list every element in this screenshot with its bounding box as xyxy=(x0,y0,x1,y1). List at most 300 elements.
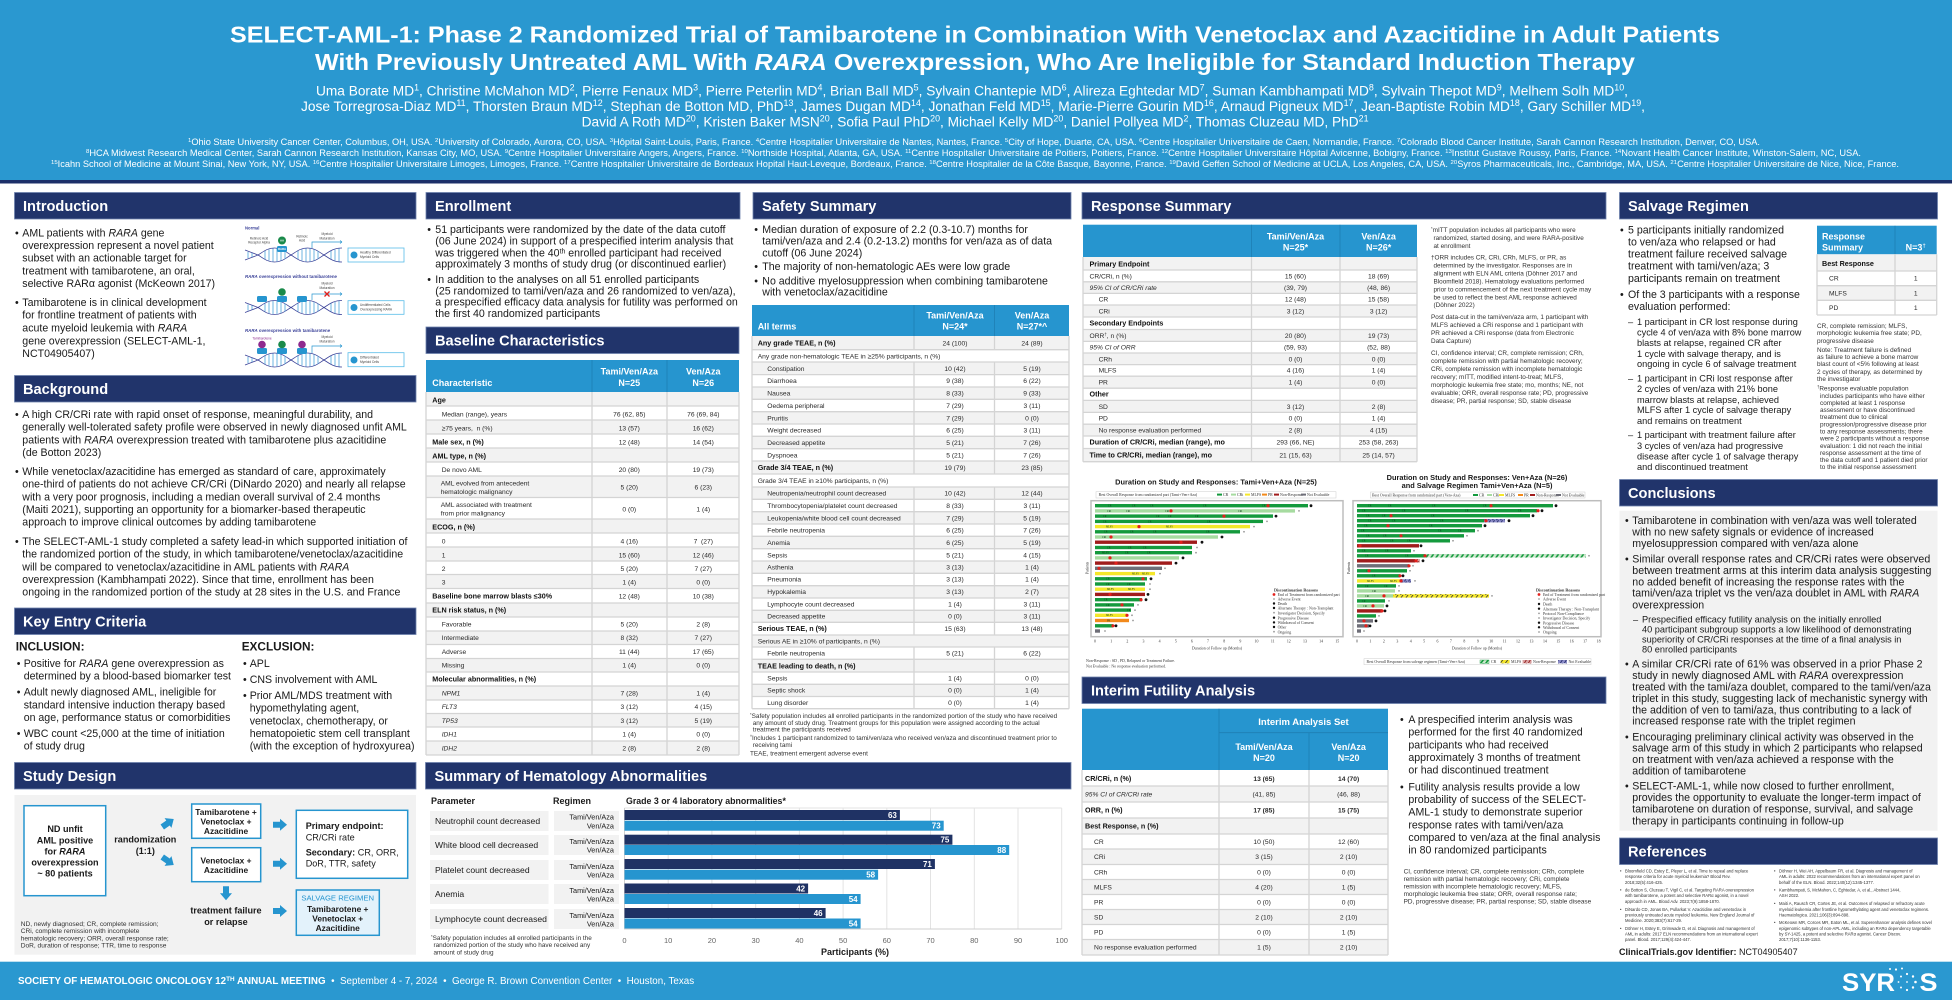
regimen labels: Tami/Ven/Aza xyxy=(569,886,615,895)
table: interim analysis set: 14 (70) xyxy=(1338,776,1359,783)
response labels inside bars, left chart: CR xyxy=(1127,609,1131,612)
text block: background bullets xyxy=(15,409,407,599)
text block: conclusions bullets: no added benefit of increasing the response rates with the xyxy=(1632,576,1904,588)
table: baseline characteristics: 1 xyxy=(442,552,446,559)
table: response summary: SD xyxy=(1099,404,1108,411)
legend: best overall response, left chart xyxy=(1096,492,1336,498)
axis: right chart: 10 xyxy=(1489,640,1493,644)
table: interim analysis set: PR xyxy=(1094,899,1103,906)
axis: right chart: 11 xyxy=(1503,640,1507,644)
response labels inside bars, left chart: CR xyxy=(1103,515,1107,518)
panel: safety summary: Safety Summary xyxy=(762,199,877,215)
legend: best overall response, right chart: Non-Response xyxy=(1536,493,1559,497)
table: treatment-emergent adverse events: 10 (42) xyxy=(944,366,966,373)
table: interim analysis set xyxy=(1082,709,1388,955)
text block: background bullets: approach to improve clinical outcomes by adding tamibarotene xyxy=(22,517,316,529)
exclusion criteria xyxy=(242,639,415,753)
table: interim analysis set: 1 (5) xyxy=(1342,929,1355,936)
exclusion criteria: • xyxy=(243,658,247,670)
table: baseline characteristics: Tami/Ven/Aza xyxy=(601,366,659,376)
table: baseline characteristics: 1 (4) xyxy=(622,580,636,587)
table: salvage response summary: Response xyxy=(1822,231,1865,241)
table: interim analysis set: CR xyxy=(1094,839,1104,846)
bar chart: grade 3 or 4 laboratory abnormalities: 10 xyxy=(664,936,672,945)
bar chart: grade 3 or 4 laboratory abnormalities: 40 xyxy=(795,936,804,945)
response labels inside bars, right chart: CR xyxy=(1405,555,1409,558)
text block: conclusions bullets xyxy=(1625,515,1932,827)
panel: enrollment: Enrollment xyxy=(435,199,511,215)
text block: conclusions bullets: myelosuppression compared with ven/aza alone xyxy=(1632,538,1859,550)
title: SELECT-AML-1: Phase 2 Randomized Trial of Tamibarotene in Combination With Venetoclax and Azacitidine in Adult Patients xyxy=(230,22,1720,48)
response labels inside bars, left chart: CR xyxy=(1206,531,1210,534)
futility abbreviations: PD, progressive disease; PR, partial response; SD, stable disease xyxy=(1404,898,1592,905)
text block: safety bullets: with venetoclax/azacitidine xyxy=(761,287,888,299)
diagram: RARA overexpression mechanism xyxy=(245,226,404,367)
legend: discontinuation reasons, left chart: Withdrawal of Consent xyxy=(1278,621,1315,625)
bar chart: grade 3 or 4 laboratory abnormalities: 54 xyxy=(849,920,858,928)
response footnotes xyxy=(1431,226,1592,405)
hematology footnote: amount of study drug xyxy=(434,950,494,957)
references left column: Döhner H, Estey E, Grimwade D, et al. Diagnosis and management of xyxy=(1625,926,1755,931)
box: triplet arm: Azacitidine xyxy=(204,826,248,836)
table: response summary: N=25* xyxy=(1283,243,1309,253)
text block: conclusions bullets: • xyxy=(1625,515,1629,527)
swimmer chart: Ven+Aza and salvage: Duration on Study and Responses: Ven+Aza (N=26) xyxy=(1387,473,1568,482)
bar chart: grade 3 or 4 laboratory abnormalities: 88 xyxy=(997,846,1007,855)
table: treatment-emergent adverse events: 5 (21) xyxy=(946,651,964,658)
axis: left chart xyxy=(1086,561,1339,650)
exclusion criteria: • xyxy=(243,674,247,686)
table: interim analysis set: 2 (10) xyxy=(1340,944,1357,951)
response labels inside bars, left chart: CR xyxy=(1153,531,1157,534)
text block: salvage bullets: • xyxy=(1620,225,1624,237)
table: response summary: 4 (15) xyxy=(1370,427,1387,434)
axis: left chart: 11 xyxy=(1271,640,1275,644)
response labels inside bars, left chart: CR xyxy=(1106,583,1110,586)
salvage footnotes: the investigator xyxy=(1817,376,1861,383)
table: baseline characteristics: 0 (0) xyxy=(696,580,710,587)
table: treatment-emergent adverse events: 5 (21) xyxy=(946,452,964,459)
table: treatment-emergent adverse events: 5 (19) xyxy=(1023,540,1041,547)
response labels inside bars, left chart: CRi xyxy=(1102,536,1106,539)
legend: salvage regimen response xyxy=(1364,659,1591,665)
table: treatment-emergent adverse events: Hypokalemia xyxy=(767,589,806,596)
parameter labels: White blood cell decreased xyxy=(435,840,538,850)
text block: background bullets: the randomized portion of the study, in which tamibarotene/venetoclax/azacitidine xyxy=(22,549,403,561)
axis: left chart: Duration of Follow up (Months) xyxy=(1192,646,1243,650)
bar chart: grade 3 or 4 laboratory abnormalities: 70 xyxy=(926,936,935,945)
safety footnotes: ^Includes 1 participant randomized to tami/ven/aza who received ven/aza and discontinued treatment prior to xyxy=(750,734,1057,742)
legend: discontinuation reasons, left chart xyxy=(1273,588,1341,634)
references right column: • xyxy=(1774,868,1776,874)
response footnotes: recovery; mITT, modified intent-to-treat; MLFS, xyxy=(1431,374,1563,381)
text block: futility bullets: probability of success of the SELECT- xyxy=(1408,794,1587,806)
table: response summary: 25 (14, 57) xyxy=(1362,452,1395,459)
text block: futility bullets: in 80 randomized participants xyxy=(1408,845,1547,857)
axis: left chart: 5 xyxy=(1175,640,1177,644)
response labels inside bars, right chart: CR xyxy=(1458,530,1462,533)
response labels inside bars, left chart: CR xyxy=(1195,515,1199,518)
text block: safety bullets: cutoff (06 June 2024) xyxy=(762,247,862,259)
parameter labels xyxy=(430,811,549,929)
response labels inside bars, right chart: CR xyxy=(1384,585,1388,588)
text block: futility bullets: A prespecified interim analysis was xyxy=(1408,714,1573,726)
logo: Syros xyxy=(1842,968,1938,997)
table: response summary: 2 (8) xyxy=(1372,404,1385,411)
table: response summary xyxy=(1083,225,1417,462)
parameter labels: Platelet count decreased xyxy=(435,865,530,875)
table: treatment-emergent adverse events: N=24* xyxy=(942,322,968,332)
table: baseline characteristics: 5 (20) xyxy=(621,484,638,491)
panel: conclusions: Conclusions xyxy=(1628,486,1716,502)
table: treatment-emergent adverse events: Sepsis xyxy=(767,675,788,682)
table: baseline characteristics: Adverse xyxy=(442,649,467,656)
table: baseline characteristics: 4 (16) xyxy=(621,538,638,545)
text block: background bullets: with a very poor prognosis, including a median overall survival of 2.4 months xyxy=(21,491,380,503)
hematology footnote xyxy=(431,934,592,957)
salvage footnotes: to any response assessments; there xyxy=(1820,428,1923,436)
table: baseline characteristics: 2 (8) xyxy=(696,745,710,752)
axis: left chart: 13 xyxy=(1303,640,1307,644)
table: treatment-emergent adverse events: 3 (11) xyxy=(1024,403,1040,410)
salvage footnotes: includes participants who have either xyxy=(1820,393,1926,400)
axis: right chart: 14 xyxy=(1543,640,1547,644)
table: interim analysis set: 0 (0) xyxy=(1257,899,1271,906)
table: baseline characteristics: 8 (32) xyxy=(621,635,638,642)
text block: conclusions bullets: 40 participant subgroup supports a low likelihood of demonstrating xyxy=(1642,624,1912,634)
references left column: DiNardo CD, Jonas BA, Pullarkat V. Azacitidine and venetoclax in xyxy=(1625,907,1747,912)
axis: right chart: 18 xyxy=(1597,640,1601,644)
logo: Syros: SYR xyxy=(1842,969,1895,997)
references left column: • xyxy=(1620,868,1622,874)
bar chart: grade 3 or 4 laboratory abnormalities: 30 xyxy=(752,936,760,945)
response labels inside bars, right chart: CR xyxy=(1440,520,1444,523)
text block: conclusions bullets: 80 enrolled participants xyxy=(1642,644,1737,654)
response labels inside bars, left chart: CR xyxy=(1132,505,1136,508)
diagram: RARA overexpression mechanism: Myeloid Cells xyxy=(360,255,379,259)
table: treatment-emergent adverse events: Constipation xyxy=(767,366,805,373)
text block: conclusions bullets: Tamibarotene in combination with ven/aza was well tolerated xyxy=(1632,515,1917,527)
response footnotes: MLFS achieved a CRi response and 1 participant with xyxy=(1431,322,1584,329)
text block: background bullets: (de Botton 2023) xyxy=(22,447,101,459)
references right column: McKeown MR, Corces MR, Eaton ML, et al. Superenhancer analysis defines novel xyxy=(1779,920,1932,925)
safety footnotes: receiving tami xyxy=(753,742,792,749)
table: interim analysis set: 12 (60) xyxy=(1338,839,1359,846)
axis: right chart: 7 xyxy=(1450,640,1452,644)
table: treatment-emergent adverse events: Febrile neutropenia xyxy=(767,651,825,658)
text block: conclusions bullets: • xyxy=(1625,554,1629,566)
futility abbreviations: remission with incomplete hematologic recovery; MLFS, xyxy=(1404,883,1562,890)
response labels inside bars, left chart: CR xyxy=(1143,546,1147,549)
box: patient population: ~ 80 patients xyxy=(37,869,93,879)
abbreviations xyxy=(21,921,169,950)
legend: best overall response, left chart: MLFS xyxy=(1251,493,1261,497)
salvage footnotes: assessment or have discontinued xyxy=(1820,407,1915,414)
panel: background xyxy=(14,376,416,599)
salvage footnotes: Note: Treatment failure is defined xyxy=(1817,347,1912,354)
exclusion criteria: hypomethylating agent, xyxy=(250,703,359,715)
table: salvage response summary: MLFS xyxy=(1829,290,1847,297)
salvage footnotes: evaluation: 1 did not reach the initial xyxy=(1820,443,1922,450)
legend: discontinuation reasons, left chart: Death xyxy=(1278,602,1287,606)
table: baseline characteristics: 10 (38) xyxy=(693,593,714,600)
table: baseline characteristics: N=26 xyxy=(692,378,714,388)
table: response summary: 95% CI of CR/CRi rate xyxy=(1090,285,1157,292)
response footnotes: *mITT population includes all participants who were xyxy=(1431,226,1576,234)
diagram: RARA overexpression mechanism: Retinoic Acid xyxy=(250,236,268,240)
legend: best overall response, right chart: MLFS xyxy=(1505,493,1515,497)
table: treatment-emergent adverse events: Decreased appetite xyxy=(767,613,826,620)
text block: safety bullets: tami/ven/aza and 2.4 (0.2-13.2) months for ven/aza as of data xyxy=(762,236,1052,248)
table: baseline characteristics: 5 (20) xyxy=(621,621,638,628)
exclusion criteria: • xyxy=(243,690,247,702)
text block: background bullets: will be compared to venetoclax/azacitidine in AML patients with RARA xyxy=(21,561,349,573)
axis: right chart: 12 xyxy=(1516,640,1520,644)
table: salvage response summary xyxy=(1817,226,1937,315)
text block: background bullets: one-third of patients do not achieve CR/CRi (DiNardo 2020) and nearly all relapse xyxy=(22,479,406,491)
response labels inside bars, left chart: CRi xyxy=(1107,510,1111,513)
box: endpoints: Secondary: CR, ORR, xyxy=(306,848,399,858)
table: baseline characteristics: Age xyxy=(432,395,446,404)
table: response summary: 3 (12) xyxy=(1287,404,1304,411)
response footnotes: randomized, started dosing, and were RARA-positive xyxy=(1434,235,1584,242)
table: treatment-emergent adverse events: Thrombocytopenia/platelet count decreased xyxy=(767,503,898,510)
panel: references xyxy=(1619,838,1938,957)
response footnotes: at enrollment xyxy=(1434,243,1471,250)
bar chart: grade 3 or 4 laboratory abnormalities: Participants (%) xyxy=(821,947,889,957)
legend: salvage regimen response: Not Evaluable xyxy=(1568,660,1591,664)
legend: best overall response, right chart xyxy=(1370,492,1585,498)
authors xyxy=(301,82,1645,130)
salvage footnotes: morphologic leukemia free state; PD, xyxy=(1817,330,1922,337)
table: baseline characteristics: AML evolved from antecedent xyxy=(441,481,529,488)
legend: best overall response, right chart: Not Evaluable xyxy=(1562,493,1585,497)
legend: discontinuation reasons, right chart: Withdrawal of Consent xyxy=(1543,626,1580,630)
table: response summary: Tami/Ven/Aza xyxy=(1267,231,1325,241)
response footnotes: PR achieved a CRi response (data from Electronic xyxy=(1431,330,1575,337)
table: baseline characteristics: 0 (0) xyxy=(696,663,710,670)
response labels inside bars, left chart: CR xyxy=(1107,546,1111,549)
table: treatment-emergent adverse events: Neutropenia/neutrophil count decreased xyxy=(767,490,887,497)
response labels inside bars, left chart: CR xyxy=(1207,520,1211,523)
table: interim analysis set: (46, 88) xyxy=(1337,791,1360,798)
regimen labels: Tami/Ven/Aza xyxy=(569,813,615,822)
panel: response summary: Response Summary xyxy=(1091,199,1232,215)
regimen labels: Ven/Aza xyxy=(587,895,615,904)
table: baseline characteristics: 17 (65) xyxy=(693,649,714,656)
table: treatment-emergent adverse events: 0 (0) xyxy=(948,613,962,620)
table: baseline characteristics: 0 xyxy=(442,538,446,545)
axis: right chart: 8 xyxy=(1463,640,1465,644)
table: baseline characteristics xyxy=(426,360,739,755)
inclusion criteria: of study drug xyxy=(24,741,85,753)
diagram: RARA overexpression mechanism: Maturation xyxy=(319,286,335,290)
text block: background bullets: • xyxy=(15,536,19,548)
response labels inside bars, right chart: CR xyxy=(1362,550,1366,553)
text block: conclusions bullets: salvage arm of this study in which 2 participants who relapsed xyxy=(1632,743,1923,755)
text block: introduction bullets xyxy=(15,227,215,360)
bar chart: grade 3 or 4 laboratory abnormalities: 80 xyxy=(970,936,978,945)
axis: right chart: 17 xyxy=(1583,640,1587,644)
diagram: RARA overexpression mechanism: Differentiated xyxy=(360,356,379,360)
salvage footnotes: to the initial response assessment xyxy=(1820,464,1916,471)
abbreviations: CRi, complete remission with incomplete xyxy=(21,928,140,935)
text block: conclusions bullets: provides the opportunity to evaluate the longer-term impact of xyxy=(1632,792,1921,804)
diagram: RARA overexpression mechanism: Overexpressing RARA xyxy=(360,308,393,312)
table: interim analysis set: (41, 85) xyxy=(1252,791,1276,798)
response labels inside bars, left chart: CRi xyxy=(1238,510,1242,513)
references right column: • xyxy=(1774,920,1776,925)
table: salvage response summary: Best Response xyxy=(1822,259,1874,268)
column headings xyxy=(431,796,786,806)
table: baseline characteristics: Ven/Aza xyxy=(686,366,722,376)
table: treatment-emergent adverse events: All terms xyxy=(758,322,796,332)
salvage footnotes xyxy=(1817,323,1930,471)
references left column: • xyxy=(1620,926,1622,931)
legend: best overall response, right chart: Best Overall Response from randomized part (Ven+Aza) xyxy=(1372,493,1461,497)
axis: right chart: 6 xyxy=(1437,640,1439,644)
panel: key entry criteria xyxy=(14,608,416,753)
inclusion criteria: determined by a blood-based biomarker test xyxy=(24,671,231,683)
box: patient population xyxy=(24,806,106,896)
response labels inside bars, right chart: CR xyxy=(1431,515,1435,518)
salvage footnotes: response assessment at the time of xyxy=(1820,450,1921,457)
references left column: de Botton S, Cluzeau T, Vigil C, et al. Targeting RARA overexpression xyxy=(1625,888,1755,892)
response labels inside bars, right chart: CR xyxy=(1364,525,1368,528)
regimen labels: Ven/Aza xyxy=(587,920,615,929)
authors: David A Roth MD20, Kristen Baker MSN20, Sofia Paul PhD20, Michael Kelly MD20, Daniel Pollyea MD2, Thomas Cluzeau MD, PhD 21 xyxy=(582,114,1369,130)
table: baseline characteristics: ECOG, n (%) xyxy=(432,522,476,531)
response footnotes: Post data-cut in the tami/ven/aza arm, 1 participant with xyxy=(1431,314,1589,321)
safety footnotes: TEAE, treatment emergent adverse event xyxy=(750,751,868,758)
response labels inside bars, right chart: CR xyxy=(1432,505,1436,508)
text block: conclusions bullets: • xyxy=(1625,781,1629,793)
box: salvage regimen: Azacitidine xyxy=(316,923,360,933)
response footnotes: †ORR includes CR, CRi, CRh, MLFS, or PR, as xyxy=(1431,254,1566,262)
arrow: doublet to endpoints xyxy=(273,858,287,870)
axis: left chart: 3 xyxy=(1143,640,1145,644)
references left column: response criteria for acute myeloid leukemia? Blood Rev. xyxy=(1625,874,1731,879)
table: response summary: CR xyxy=(1099,296,1108,303)
legend: discontinuation reasons, right chart: Adverse Event xyxy=(1543,598,1567,602)
table: treatment-emergent adverse events: 19 (79) xyxy=(944,465,966,472)
table: response summary: 19 (73) xyxy=(1368,333,1389,340)
table: interim analysis set: ORR, n (%) xyxy=(1085,806,1123,814)
table: response summary: Time to CR/CRi, median (range), mo xyxy=(1090,450,1213,460)
response labels inside bars, right chart: CR xyxy=(1390,540,1394,543)
table: treatment-emergent adverse events: 6 (22) xyxy=(1023,651,1041,658)
references right column: Haematologica. 2021;106(3):894-898. xyxy=(1779,912,1850,918)
table: response summary: 3 (12) xyxy=(1370,308,1387,315)
axis: left chart: 9 xyxy=(1239,640,1241,644)
safety footnotes: *Safety population includes all enrolled participants in the randomized portion of the study who have received xyxy=(750,712,1058,720)
column headings: Parameter xyxy=(431,796,476,806)
text block: salvage bullets: to ven/aza who relapsed or had xyxy=(1628,237,1776,249)
table: baseline characteristics: 6 (23) xyxy=(695,484,712,491)
table: baseline characteristics: 14 (54) xyxy=(693,439,714,446)
text block: conclusions bullets: Encouraging preliminary clinical activity was observed in the xyxy=(1632,731,1914,743)
table: baseline characteristics: Molecular abnormalities, n (%) xyxy=(432,675,537,684)
box: endpoints xyxy=(296,810,408,878)
text block: enrollment bullets: 51 participants were randomized by the date of the data cutoff xyxy=(435,224,725,236)
safety footnotes: treatment the participants received xyxy=(753,727,851,734)
table: baseline characteristics: Baseline bone marrow blasts ≤30% xyxy=(432,591,553,600)
table: treatment-emergent adverse events: Any grade TEAE, n (%) xyxy=(758,338,836,348)
label: treatment failure: or relapse xyxy=(204,917,248,927)
parameter labels: Anemia xyxy=(435,889,464,899)
table: response summary: 0 (0) xyxy=(1372,379,1385,386)
box: endpoints: DoR, TTR, safety xyxy=(306,859,376,869)
table: baseline characteristics: ELN risk status, n (%) xyxy=(432,605,507,614)
text block: background bullets: (Maiti 2021), supporting an opportunity for a biomarker-based therapeutic xyxy=(22,504,366,516)
legend: discontinuation reasons, left chart: Discontinuation Reasons xyxy=(1274,588,1318,592)
response footnotes: determined by the investigator. Responses are in xyxy=(1434,262,1572,270)
panel: salvage regimen: Salvage Regimen xyxy=(1628,199,1749,215)
response labels inside bars, left chart: CR xyxy=(1104,531,1108,534)
footer banner xyxy=(0,962,1952,1000)
text block: salvage bullets: MLFS after 1 cycle of salvage therapy xyxy=(1637,405,1792,415)
axis: left chart: 14 xyxy=(1319,640,1323,644)
table: treatment-emergent adverse events: 15 (63) xyxy=(944,626,966,633)
table: treatment-emergent adverse events: Leukopenia/white blood cell count decreased xyxy=(767,515,901,522)
text block: safety bullets: No additive myelosuppression when combining tamibarotene xyxy=(762,275,1048,287)
table: treatment-emergent adverse events: 12 (44) xyxy=(1021,490,1043,497)
text block: salvage bullets: cycle 4 of ven/aza with 8% bone marrow xyxy=(1637,328,1802,338)
panel: response summary xyxy=(1082,192,1606,668)
table: treatment-emergent adverse events: 0 (0) xyxy=(948,687,962,694)
diagram: RARA overexpression mechanism: Normal xyxy=(245,226,259,230)
text block: salvage bullets: 3 cycles of ven/aza had progressive xyxy=(1637,441,1783,451)
response labels inside bars, left chart: CR xyxy=(1203,505,1207,508)
diagram: RARA overexpression mechanism: AA xyxy=(280,238,284,242)
references right column: myeloid leukemia after frontline hypomethylating agent and venetoclax regimens. xyxy=(1779,907,1929,912)
table: treatment-emergent adverse events: 5 (19) xyxy=(1023,366,1041,373)
futility abbreviations: remission with partial hematologic recovery; CRi, complete xyxy=(1404,876,1570,883)
table: baseline characteristics: 1 (4) xyxy=(622,732,636,739)
table: treatment-emergent adverse events: 3 (13) xyxy=(946,589,964,596)
diagram: RARA overexpression mechanism: Myeloid xyxy=(322,232,333,236)
response labels inside bars, left chart: MLFS xyxy=(1166,526,1173,528)
box: patient population: AML positive xyxy=(37,835,93,845)
table: interim analysis set: N=20 xyxy=(1338,753,1359,763)
table: treatment-emergent adverse events: Lung disorder xyxy=(767,700,809,707)
response labels inside bars, right chart: CR xyxy=(1392,520,1396,523)
response footnotes: alignment with ELN AML criteria (Döhner 2017 and xyxy=(1434,270,1578,278)
response labels inside bars, left chart: CRi xyxy=(1126,510,1130,513)
table: response summary: No response evaluation performed xyxy=(1099,427,1201,434)
text block: background bullets: ongoing in the randomized portion of the study at 28 sites in the U.S. and France xyxy=(22,587,400,599)
text block: safety bullets: The majority of non-hematologic AEs were low grade xyxy=(762,261,1010,273)
table: treatment-emergent adverse events: 6 (25) xyxy=(946,427,964,434)
response labels inside bars, left chart: CR xyxy=(1130,531,1134,534)
response footnotes: Data Capture) xyxy=(1431,338,1471,345)
table: response summary: PD xyxy=(1099,415,1108,422)
text block: safety bullets: Median duration of exposure of 2.2 (0.3-10.7) months for xyxy=(762,224,1028,236)
title xyxy=(230,22,1720,75)
response labels inside bars, right chart: CR xyxy=(1382,515,1386,518)
salvage footnotes: completed at least 1 response xyxy=(1820,400,1906,407)
table: interim analysis set: 0 (0) xyxy=(1342,899,1355,906)
references right column: 2017;7(10):1136-1153. xyxy=(1779,937,1821,942)
salvage footnotes: †Response evaluable population xyxy=(1817,384,1909,392)
response footnotes: prior to commencement of the next treatment cycle may xyxy=(1434,286,1592,294)
panel: background: Background xyxy=(23,382,108,398)
response labels inside bars, left chart: PR xyxy=(1107,619,1110,622)
text block: conclusions bullets: triplet in this study, suggesting lack of mechanistic synergy with xyxy=(1632,693,1928,705)
table: response summary: 1 (4) xyxy=(1372,367,1385,374)
legend: discontinuation reasons, left chart: Investigator Decision, Specify xyxy=(1278,611,1325,616)
table: response summary: Ven/Aza xyxy=(1361,231,1397,241)
